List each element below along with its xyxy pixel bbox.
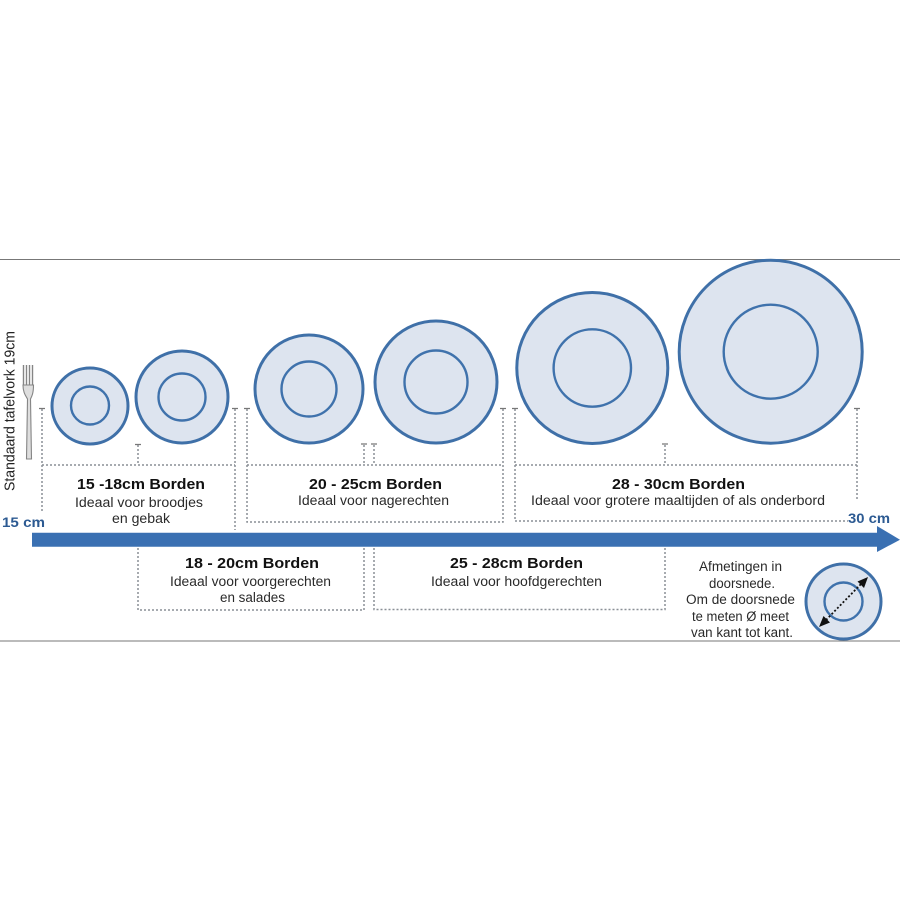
bottom rule (0, 640, 900, 642)
plate 28 cm (517, 292, 668, 444)
plate 25 cm (375, 321, 497, 443)
bracket: 15-18 cm (39, 408, 238, 530)
text: 15-18 cm use (75, 495, 203, 526)
text: 20-25 cm use: Ideaal voor nagerechten (298, 493, 449, 508)
label: 30 cm: 30 cm (848, 510, 890, 526)
arrow: size scale (32, 526, 900, 552)
text: 25-28 cm use: Ideaal voor hoofdgerechten (431, 574, 602, 589)
bracket: 25-28 cm (374, 548, 665, 610)
text: 18-20 cm use: en salades (220, 590, 285, 605)
heading: 28-30 cm: 28 - 30cm Borden (612, 476, 745, 493)
text: 15-18 cm use: Ideaal voor broodjes (75, 495, 203, 510)
callout: how to measure: te meten Ø meet (692, 609, 789, 624)
bracket: 18-20 cm (138, 548, 364, 610)
text: 18-20 cm use: Ideaal voor voorgerechten (170, 574, 331, 589)
text: 15-18 cm use: en gebak (112, 511, 170, 526)
callout: how to measure: Om de doorsnede (686, 592, 795, 607)
plate 20 cm (255, 335, 363, 443)
icon: fork (23, 365, 34, 459)
fork label: Standaard tafelvork 19cm (2, 331, 18, 491)
top rule (0, 258, 900, 260)
icon: measuring plate with diameter arrow (806, 564, 881, 639)
plate 15 cm (52, 368, 128, 444)
heading: 15-18 cm: 15 -18cm Borden (77, 476, 205, 493)
callout: how to measure: van kant tot kant. (691, 625, 793, 640)
plate 30 cm (679, 260, 862, 443)
plate 18 cm (136, 351, 228, 443)
callout: how to measure: Afmetingen in (699, 559, 782, 574)
bracket: 28-30 cm (512, 408, 860, 521)
heading: 18-20 cm: 18 - 20cm Borden (185, 555, 319, 572)
callout: how to measure: doorsnede. (709, 576, 775, 591)
heading: 25-28 cm: 25 - 28cm Borden (450, 555, 583, 572)
text: 28-30 cm use: Ideaal voor grotere maaltijden of als onderbord (531, 493, 825, 508)
bracket: 20-25 cm (244, 408, 506, 522)
heading: 20-25 cm: 20 - 25cm Borden (309, 476, 442, 493)
callout: how to measure (686, 559, 795, 640)
label: 15 cm: 15 cm (2, 514, 45, 530)
text: 18-20 cm use (170, 574, 331, 605)
